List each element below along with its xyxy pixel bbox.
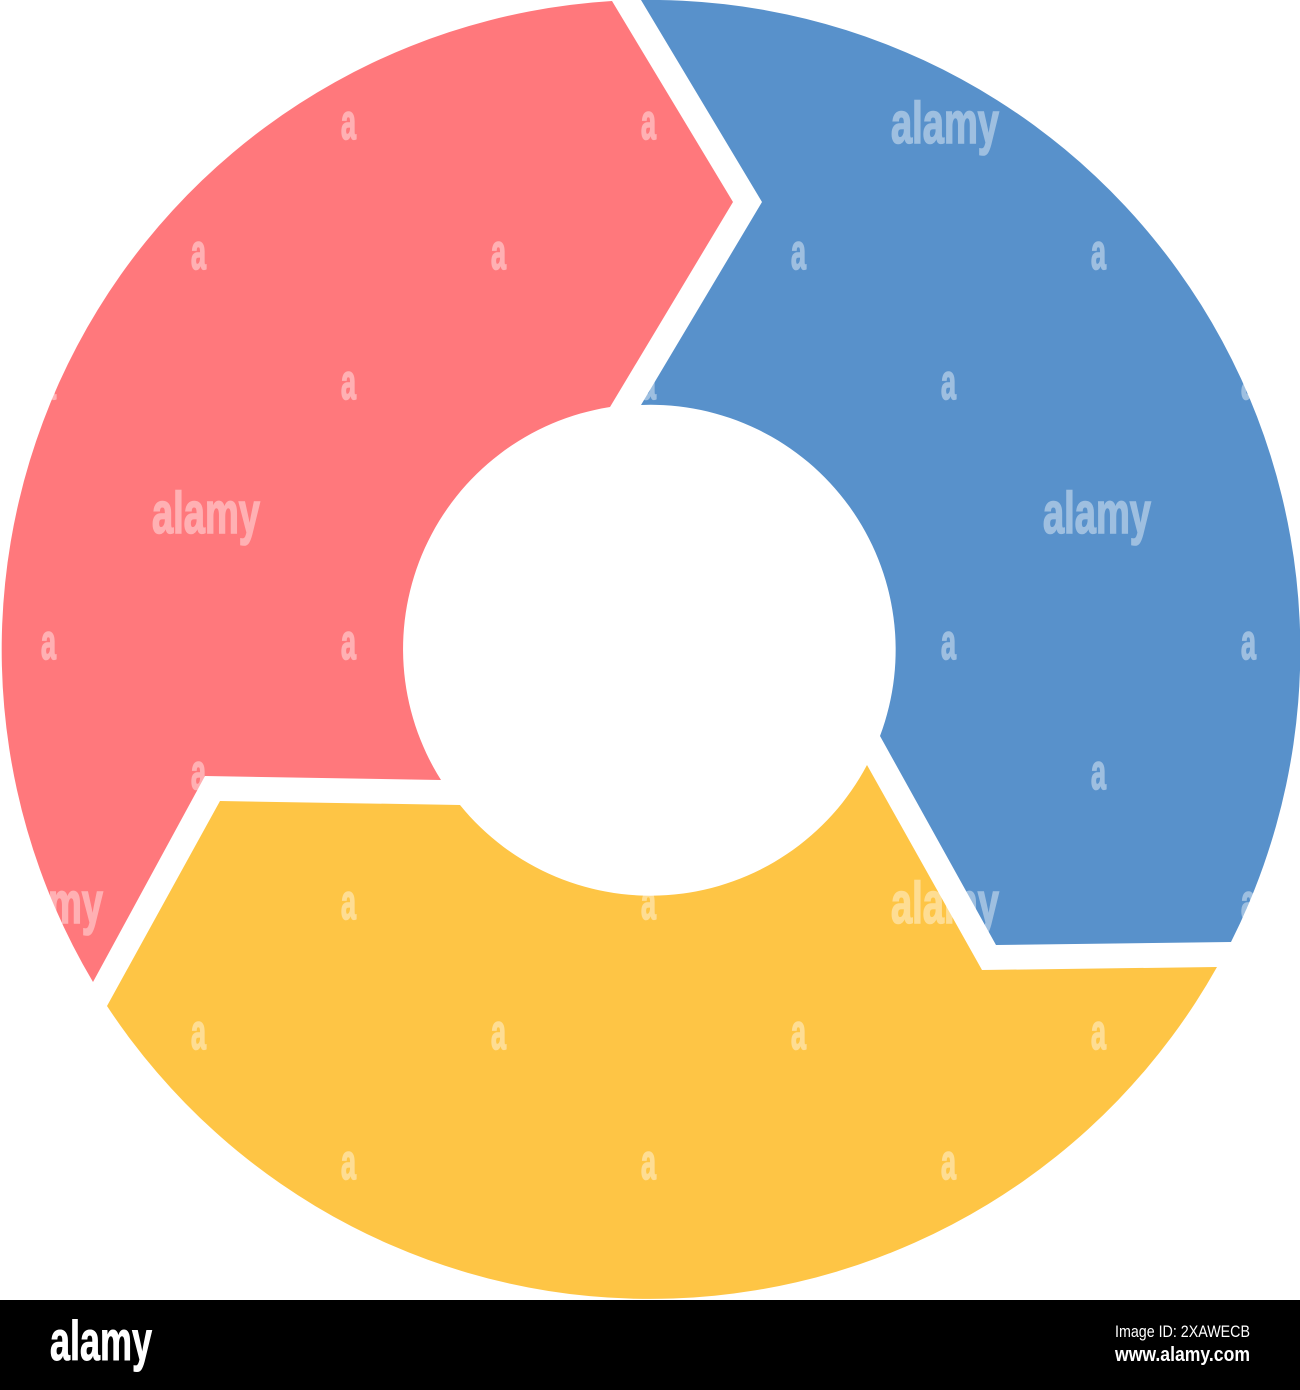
watermark pattern: a: [341, 1134, 357, 1190]
watermark pattern: a: [641, 94, 657, 150]
watermark pattern: a: [41, 614, 57, 670]
watermark pattern: a: [341, 614, 357, 670]
watermark pattern: alamy: [891, 91, 999, 156]
watermark pattern: a: [641, 1134, 657, 1190]
watermark pattern: a: [41, 354, 57, 410]
watermark pattern: a: [1241, 874, 1257, 930]
watermark pattern: a: [1091, 744, 1107, 800]
watermark pattern: a: [941, 354, 957, 410]
watermark pattern: a: [791, 1004, 807, 1060]
segment: blue arrow: [641, 0, 1300, 945]
watermark pattern: a: [641, 874, 657, 930]
watermark pattern: a: [941, 1134, 957, 1190]
watermark pattern: alamy: [1043, 481, 1151, 546]
watermark pattern: alamy: [891, 871, 999, 936]
watermark pattern: a: [191, 744, 207, 800]
watermark pattern: a: [341, 354, 357, 410]
footer bar: [0, 1300, 1300, 1390]
image id: Image ID: 2XAWECB: [1115, 1322, 1250, 1341]
watermark pattern: a: [941, 614, 957, 670]
watermark pattern: a: [191, 1004, 207, 1060]
website: www.alamy.com: [1114, 1344, 1250, 1366]
watermark pattern: a: [341, 874, 357, 930]
watermark pattern: a: [491, 1004, 507, 1060]
watermark pattern: a: [1241, 354, 1257, 410]
watermark pattern: alamy: [152, 481, 260, 546]
watermark pattern: [0, 91, 1257, 1190]
watermark pattern: a: [491, 224, 507, 280]
watermark pattern: a: [1091, 224, 1107, 280]
watermark pattern: a: [1241, 614, 1257, 670]
watermark pattern: a: [341, 94, 357, 150]
segment: yellow arrow: [107, 765, 1217, 1299]
segment: red arrow: [2, 1, 733, 982]
watermark pattern: a: [191, 224, 207, 280]
footer logo: alamy: [50, 1309, 152, 1372]
watermark pattern: a: [1091, 1004, 1107, 1060]
watermark pattern: a: [791, 224, 807, 280]
watermark pattern: a: [641, 354, 657, 410]
